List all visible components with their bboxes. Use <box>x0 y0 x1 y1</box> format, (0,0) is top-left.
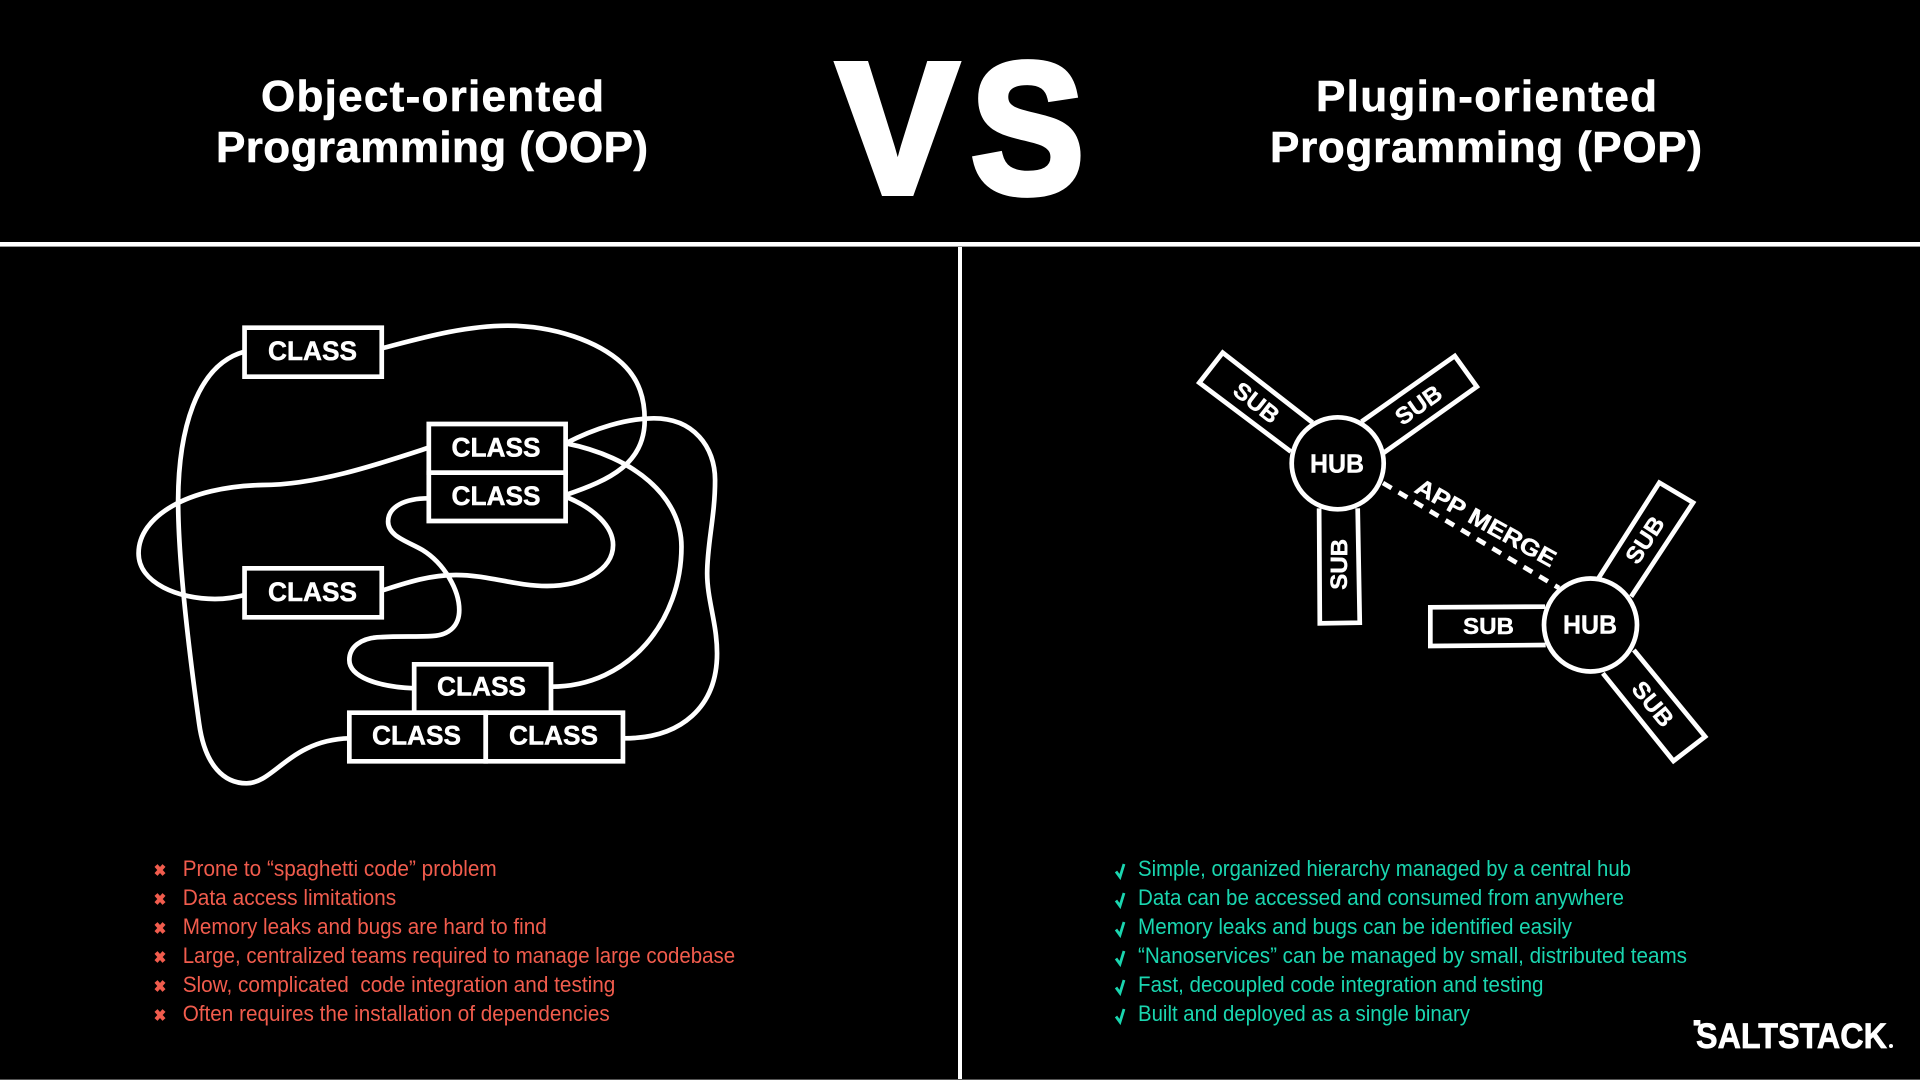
text: drawback lines <box>183 856 735 1026</box>
icons: red crosses <box>156 866 164 1020</box>
class labels <box>268 336 598 750</box>
text: benefit lines: Memory leaks and bugs can be identified easily <box>1138 914 1572 939</box>
sub labels: SUB <box>1463 613 1514 639</box>
title: VS <box>837 26 1084 232</box>
text: drawback lines: Prone to “spaghetti code” problem <box>183 856 497 881</box>
label: APP MERGE: APP MERGE <box>1411 473 1561 572</box>
heading: Plugin-oriented Programming (POP): Plugin-oriented <box>1316 72 1657 121</box>
class labels: CLASS <box>509 720 598 750</box>
list: POP benefits <box>1116 856 1687 1026</box>
class labels: CLASS <box>452 433 540 463</box>
text: benefit lines <box>1138 856 1687 1026</box>
sub labels: SUB <box>1390 380 1447 430</box>
logo: SaltStack: SALTSTACK <box>1696 1017 1887 1056</box>
text: drawback lines: Data access limitations <box>183 885 396 910</box>
panel: OOP spaghetti diagram <box>139 326 717 783</box>
text: drawback lines: Memory leaks and bugs are hard to find <box>183 914 547 939</box>
divider: vertical rule <box>958 247 962 1079</box>
heading: Object-oriented Programming (OOP): Object-oriented <box>261 72 604 121</box>
hub: first hub: HUB <box>1310 451 1364 479</box>
sub arms <box>1199 353 1705 761</box>
text: benefit lines: Built and deployed as a single binary <box>1138 1001 1470 1026</box>
title: VS: V <box>837 26 958 232</box>
connector: app merge dashed line <box>1383 483 1559 588</box>
class labels: CLASS <box>452 481 540 511</box>
text: benefit lines: Fast, decoupled code integration and testing <box>1138 972 1544 997</box>
class labels: CLASS <box>268 336 357 366</box>
text: drawback lines: Often requires the installation of dependencies <box>183 1001 610 1026</box>
text: benefit lines: “Nanoservices” can be managed by small, distributed teams <box>1138 943 1687 968</box>
text: drawback lines: Large, centralized teams required to manage large codebase <box>183 943 735 968</box>
list: OOP drawbacks <box>156 856 735 1026</box>
sub labels: SUB <box>1627 676 1679 732</box>
heading: Plugin-oriented Programming (POP): Programming (POP) <box>1270 123 1702 172</box>
heading: Object-oriented Programming (OOP) <box>216 72 648 172</box>
icons: teal checks <box>1116 864 1124 1022</box>
sub labels: SUB <box>1228 377 1284 429</box>
text: drawback lines: Slow, complicated code integration and testing <box>183 972 615 997</box>
panel: POP hub and sub diagram <box>1199 353 1705 761</box>
heading: Plugin-oriented Programming (POP) <box>1270 72 1702 172</box>
text: benefit lines: Simple, organized hierarchy managed by a central hub <box>1138 856 1631 881</box>
heading: Object-oriented Programming (OOP): Programming (OOP) <box>216 123 648 172</box>
connectors: tangled class links <box>139 326 717 783</box>
class labels: CLASS <box>268 577 357 607</box>
sub labels <box>1228 377 1679 732</box>
divider: horizontal rule <box>0 242 1920 247</box>
sub labels: SUB <box>1326 539 1352 590</box>
hub: second hub: HUB <box>1563 611 1617 639</box>
title: VS: S <box>971 26 1084 232</box>
class labels: CLASS <box>372 720 461 750</box>
hub: second hub <box>1544 578 1637 672</box>
class boxes <box>245 328 623 761</box>
class labels: CLASS <box>437 672 526 702</box>
text: benefit lines: Data can be accessed and consumed from anywhere <box>1138 885 1624 910</box>
sub labels: SUB <box>1620 512 1670 568</box>
hub: first hub <box>1292 417 1384 509</box>
